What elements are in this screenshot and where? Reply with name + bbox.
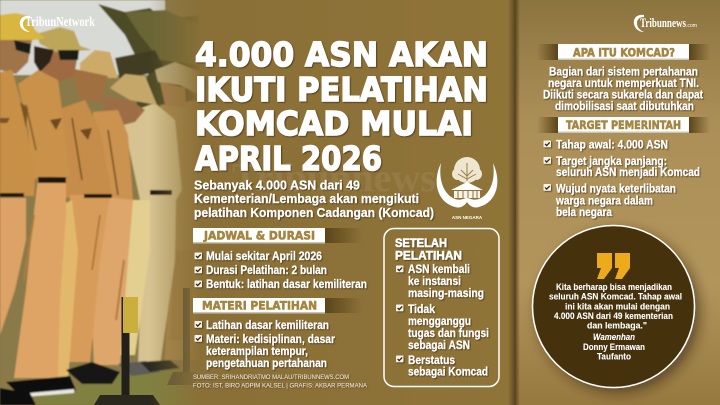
quote text: Kita berharap bisa menjadikan — [556, 282, 672, 292]
ground and shoes — [36, 368, 200, 405]
list: setelah pelatihan: mengganggu — [408, 314, 471, 328]
fade of photo into gold — [150, 0, 202, 405]
logo: Tribunnews: .com — [686, 23, 697, 29]
heading: setelah pelatihan: PELATIHAN — [395, 248, 462, 262]
icon: quotation mark — [597, 253, 630, 279]
list: jadwal: Bentuk: latihan dasar kemiliteran — [206, 277, 367, 291]
list: setelah pelatihan: Tidak — [408, 302, 435, 316]
heading: setelah pelatihan: SETELAH — [395, 236, 447, 250]
list: jadwal: Durasi Pelatihan: 2 bulan — [206, 263, 327, 277]
logo: TribunNetwork: TribunNetwork — [25, 14, 95, 29]
subtitle: pelatihan Komponen Cadangan (Komcad) — [194, 205, 434, 220]
heading: target pemerintah — [537, 117, 710, 133]
quote attribution: Wamenhan — [593, 332, 635, 342]
list: materi: Latihan dasar kemiliteran — [206, 318, 329, 332]
list: setelah pelatihan: masing-masing — [408, 286, 484, 300]
heading: apa itu komcad: APA ITU KOMCAD? — [573, 46, 675, 60]
list: setelah pelatihan: tugas dan fungsi — [408, 326, 489, 340]
subtitle — [194, 178, 434, 220]
heading: target pemerintah: TARGET PEMERINTAH — [566, 118, 681, 132]
subtitle: Kementerian/Lembaga akan mengikuti — [194, 191, 419, 206]
officer 3 — [80, 50, 118, 78]
list: target: Wujud nyata keterlibatan — [556, 182, 676, 196]
title: APRIL 2026 — [195, 139, 382, 178]
list: setelah pelatihan: ke instansi — [408, 274, 461, 288]
right panel background — [508, 0, 720, 405]
heading: materi pelatihan — [193, 298, 362, 314]
paragraph: definition: dimobilisasi saat dibutuhkan — [555, 99, 694, 113]
rear officers — [160, 100, 200, 360]
source credits: FOTO: IST, BIRO ADPIM KALSEL | GRAFIS: AKBAR PERMANA — [193, 382, 368, 390]
quote attribution: Donny Ermawan — [583, 342, 645, 352]
paragraph: definition — [543, 64, 703, 113]
quote attribution: Taufanto — [597, 352, 632, 362]
quote text: seluruh ASN Komcad. Tahap awal — [549, 292, 682, 302]
officer 4 — [110, 74, 157, 105]
subtitle: Sebanyak 4.000 ASN dari 49 — [194, 178, 360, 192]
heading: setelah pelatihan — [395, 236, 462, 262]
logo: Tribunnews: Tribunnews — [640, 15, 686, 30]
list: materi: pengetahuan pertahanan — [206, 356, 327, 370]
title: KOMCAD MULAI — [195, 104, 473, 143]
list: setelah pelatihan — [396, 262, 489, 378]
list: target: bela negara — [556, 205, 612, 219]
heading: materi pelatihan: MATERI PELATIHAN — [202, 298, 317, 312]
panel: setelah pelatihan — [384, 228, 499, 386]
heading: apa itu komcad — [537, 44, 710, 60]
panel: target pemerintah — [537, 117, 710, 219]
heading: jadwal & durasi: JADWAL & DURASI — [203, 228, 315, 242]
panel: materi pelatihan — [193, 298, 362, 370]
uniform shadows and belts — [0, 177, 172, 198]
list: materi: keterampilan tempur, — [206, 344, 308, 358]
icon: ASN Negara emblem — [437, 157, 497, 220]
officer 2 — [36, 27, 92, 52]
photo: row of ASN officers in uniform — [0, 0, 200, 405]
list: setelah pelatihan: Berstatus — [408, 353, 455, 367]
list: target — [544, 138, 700, 219]
list: target: Tahap awal: 4.000 ASN — [556, 138, 668, 152]
list: setelah pelatihan: sebagai ASN — [408, 338, 470, 352]
list: jadwal — [194, 249, 367, 291]
panel: jadwal & durasi — [193, 228, 367, 291]
list: jadwal: Mulai sekitar April 2026 — [206, 249, 322, 263]
logo: TribunNetwork — [20, 14, 95, 32]
sign stand — [94, 288, 196, 405]
officer 1 — [0, 13, 45, 43]
title: 4.000 ASN AKAN — [195, 35, 488, 74]
list: setelah pelatihan: sebagai Komcad — [408, 364, 488, 378]
watermark: Tribunnews — [232, 155, 436, 200]
heading: jadwal & durasi — [193, 228, 362, 244]
title: IKUTI PELATIHAN — [195, 70, 488, 109]
title — [195, 35, 488, 178]
quote text — [549, 282, 682, 330]
list: target: warga negara dalam — [555, 194, 653, 208]
list: target: Target jangka panjang: — [556, 154, 667, 168]
source credits: SUMBER: SRIHANDRIATMO MALAU/TRIBUNNEWS.COM — [193, 374, 349, 381]
quote attribution — [583, 332, 645, 362]
quote text: 4.000 ASN dari 49 kementerian — [554, 311, 673, 321]
panel: apa itu komcad — [537, 44, 710, 113]
callout: quote circle — [532, 226, 694, 388]
list: materi: Materi: kedisiplinan, dasar — [206, 332, 335, 346]
quote text: dan lembaga." — [587, 320, 647, 330]
quote text: ini kita akan mulai dengan — [565, 302, 670, 312]
list: materi — [194, 318, 335, 370]
source credits — [193, 374, 368, 390]
list: setelah pelatihan: ASN kembali — [408, 262, 470, 276]
icon: ASN Negara emblem: ASN NEGARA — [452, 215, 483, 220]
